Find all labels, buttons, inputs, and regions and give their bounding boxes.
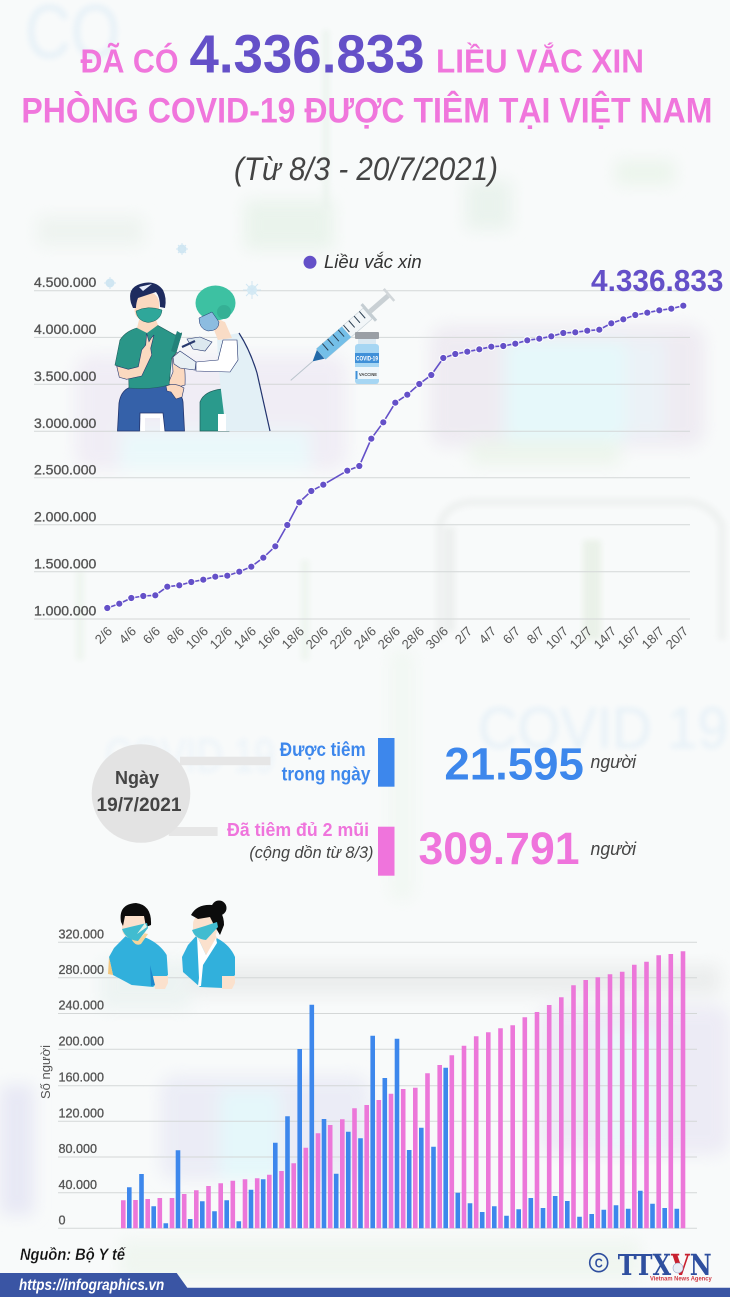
line chart x axis dates: 26/6	[375, 624, 403, 652]
pink bars: fully vaccinated	[123, 951, 683, 1228]
logo: TTXVN: C	[595, 1256, 603, 1270]
bar chart y axis labels: 0	[58, 1214, 66, 1228]
stat: fully vaccinated: người	[590, 839, 637, 859]
footer band with website url	[0, 1273, 730, 1297]
line chart x axis dates: 22/6	[327, 624, 355, 652]
bar chart y axis labels: 80.000	[58, 1142, 97, 1156]
icon: man receiving vaccine and nurse	[115, 282, 270, 431]
line chart x axis dates: 14/6	[231, 624, 259, 652]
title: LIỀU VẮC XIN	[436, 43, 644, 80]
subtitle: date range: (Từ 8/3 - 20/7/2021)	[234, 151, 498, 187]
stat: vaccinated in the day	[280, 738, 637, 789]
line chart y axis labels: 2.000.000	[34, 508, 96, 524]
line chart x axis dates: 30/6	[423, 624, 451, 652]
line chart x axis dates: 14/7	[591, 624, 619, 652]
date circle with connectors	[92, 744, 270, 843]
line chart: vaccine doses	[34, 252, 724, 652]
stat: fully vaccinated: (cộng dồn từ 8/3)	[249, 843, 373, 862]
line chart y axis labels	[34, 274, 96, 618]
stat: fully vaccinated	[227, 819, 637, 876]
line chart y axis labels: 1.500.000	[34, 555, 96, 571]
logo: TTXVN: TTXVN	[618, 1248, 712, 1282]
line chart x axis dates: 20/6	[303, 624, 331, 652]
line chart legend: Liều vắc xin	[324, 252, 422, 272]
line chart x axis dates: 6/6	[140, 624, 163, 647]
stat: vaccinated in the day: Được tiêm	[280, 740, 366, 761]
bar chart y axis labels: 200.000	[58, 1034, 104, 1048]
line chart x axis dates: 16/6	[255, 624, 283, 652]
line chart x axis dates: 12/7	[567, 624, 595, 652]
line chart x axis dates: 6/7	[500, 624, 523, 647]
line chart y axis labels: 1.000.000	[34, 602, 96, 618]
bar chart axis title: Số người	[38, 1045, 53, 1099]
line chart x axis dates	[92, 624, 691, 652]
icon: vaccine vial	[355, 332, 379, 384]
final value callout: 4.336.833	[591, 264, 724, 298]
line chart x axis dates: 24/6	[351, 624, 379, 652]
line chart x axis dates: 10/6	[183, 624, 211, 652]
stat: vaccinated in the day: 21.595	[444, 738, 584, 789]
line chart y axis labels: 4.500.000	[34, 274, 96, 290]
bar chart y axis labels: 240.000	[58, 999, 104, 1013]
title: ĐÃ CÓ	[80, 43, 178, 80]
source: Nguồn: Bộ Y tế	[20, 1245, 126, 1264]
line chart x axis dates: 4/6	[116, 624, 139, 647]
line chart y axis labels: 2.500.000	[34, 461, 96, 477]
stat: fully vaccinated: 309.791	[418, 823, 580, 874]
stat: vaccinated in the day: trong ngày	[282, 765, 371, 786]
bar chart y axis labels: 40.000	[58, 1178, 97, 1192]
footer band with website url: https://infographics.vn	[19, 1277, 164, 1294]
line chart x axis dates: 18/6	[279, 624, 307, 652]
date circle with connectors: 19/7/2021	[96, 795, 182, 816]
bar chart y axis labels: 160.000	[58, 1071, 104, 1085]
bar chart y axis labels	[58, 927, 104, 1228]
line chart x axis dates: 2/6	[92, 624, 115, 647]
icon: vaccine vial: VACCINE	[359, 372, 377, 377]
line chart x axis dates: 2/7	[452, 624, 475, 647]
panel: statistics for 19/7/2021	[92, 738, 637, 876]
line chart y axis labels: 3.000.000	[34, 415, 96, 431]
icon: syringe	[284, 286, 397, 389]
title: 4.336.833	[190, 25, 424, 85]
icon: virus particles	[104, 243, 261, 299]
line chart x axis dates: 20/7	[663, 624, 691, 652]
line chart x axis dates: 28/6	[399, 624, 427, 652]
icon: masked woman	[182, 900, 235, 989]
title	[21, 25, 712, 130]
bar chart y axis labels: 320.000	[58, 927, 104, 941]
line chart x axis dates: 4/7	[476, 624, 499, 647]
line chart x axis dates: 18/7	[639, 624, 667, 652]
man	[115, 282, 185, 431]
background: blurred vaccine vials photo: COVID 19	[105, 730, 275, 783]
icon: vaccine vial: COVID-19	[356, 356, 379, 362]
bar chart: daily and cumulative vaccinated people	[38, 927, 697, 1228]
stat: fully vaccinated: Đã tiêm đủ 2 mũi	[227, 819, 369, 840]
line chart x axis dates: 12/6	[207, 624, 235, 652]
bar chart y axis labels: 280.000	[58, 963, 104, 977]
line chart x axis dates: 16/7	[615, 624, 643, 652]
date circle with connectors: Ngày	[115, 768, 159, 788]
nurse	[173, 286, 270, 431]
data line with dots	[104, 302, 687, 612]
logo: TTXVN: Vietnam News Agency	[650, 1276, 712, 1283]
line chart y axis labels: 3.500.000	[34, 368, 96, 384]
line chart x axis dates: 10/7	[543, 624, 571, 652]
stat: vaccinated in the day: người	[590, 752, 637, 772]
blue bars: vaccinated per day	[129, 1005, 677, 1228]
icon: masked man	[108, 903, 168, 989]
line chart y axis labels: 4.000.000	[34, 321, 96, 337]
line chart x axis dates: 8/7	[524, 624, 547, 647]
line chart x axis dates: 8/6	[164, 624, 187, 647]
bar chart y axis labels: 120.000	[58, 1106, 104, 1120]
